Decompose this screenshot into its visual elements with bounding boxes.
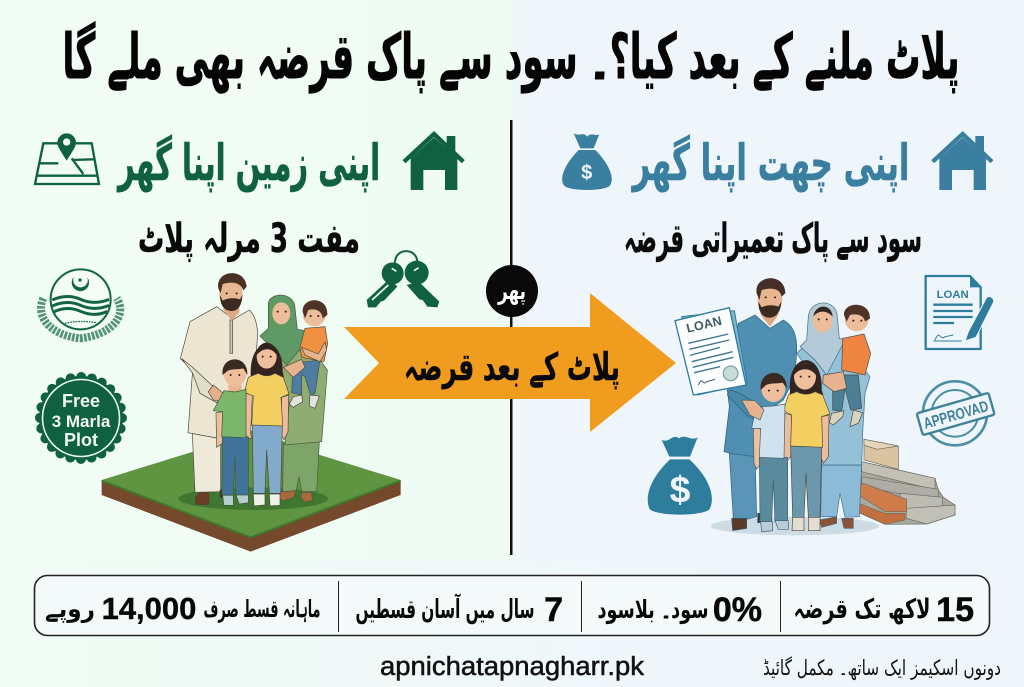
girl — [789, 360, 823, 395]
stat: zero percent interest: 0% — [713, 591, 762, 629]
stat: 15 lakh loan: لاکھ تک قرضہ — [794, 594, 930, 625]
left heading: اپنی زمین اپنا گھر — [116, 134, 380, 193]
grass plot — [102, 430, 401, 537]
father — [724, 315, 797, 531]
icon: approved stamp — [917, 381, 995, 445]
toddler — [283, 327, 328, 408]
website: apnichatapnagharr.pk — [380, 653, 644, 681]
black circle: then — [486, 265, 538, 317]
icon: loan paper and pen — [926, 276, 994, 349]
badge: Free 3 Marla Plot: 3 Marla — [52, 412, 111, 431]
illustration: family on a grass plot — [102, 273, 401, 552]
icon: money bag small — [562, 133, 612, 190]
loan document — [675, 308, 747, 395]
icon: loan paper and pen: LOAN — [937, 289, 969, 301]
panel: right loan scheme — [562, 133, 995, 535]
stat: monthly installment: ماہانہ قسط صرف — [204, 595, 320, 623]
icon: money bag large — [648, 437, 712, 515]
stat: monthly installment: روپے — [45, 595, 95, 623]
stat: seven years — [356, 591, 563, 629]
icon: money bag large: $ — [670, 468, 691, 510]
stat: 15 lakh loan: 15 — [936, 591, 974, 629]
icon: keys — [367, 251, 439, 307]
panel: left plot scheme — [35, 133, 463, 552]
icon: approved stamp: APPROVAD — [922, 398, 990, 433]
icon: blue house — [933, 134, 992, 190]
stat: seven years: سال میں آسان قسطیں — [356, 593, 534, 625]
left subheading: مفت 3 مرلہ پلاٹ — [138, 216, 360, 262]
soil block — [102, 480, 401, 552]
mother — [260, 295, 327, 502]
stat: seven years: 7 — [544, 591, 563, 629]
boy — [761, 375, 785, 402]
arrow: loan after plot: پلاٹ کے بعد قرضہ — [404, 345, 620, 389]
arrow: loan after plot — [344, 293, 676, 432]
black circle: then: پھر — [497, 277, 526, 305]
stat: monthly installment — [45, 591, 320, 626]
mother — [797, 303, 870, 528]
loan document: LOAN — [685, 314, 723, 336]
icon: map pin — [35, 133, 99, 184]
building materials — [857, 439, 955, 524]
icon: green house — [404, 134, 463, 190]
icon: Punjab emblem — [41, 269, 120, 338]
icon: money bag small: $ — [581, 162, 592, 184]
badge: Free 3 Marla Plot: Free — [62, 391, 100, 411]
girl — [251, 344, 284, 377]
boy — [228, 385, 242, 393]
toddler — [823, 334, 871, 427]
stat: zero percent interest: سود۔ بلاسود — [598, 595, 708, 625]
ground shadow — [711, 517, 879, 535]
stat: monthly installment: 14,000 — [102, 591, 196, 626]
father — [180, 307, 258, 505]
badge: Free 3 Marla Plot — [39, 376, 123, 460]
stats bar — [34, 576, 990, 636]
illustration: family with loan document and materials — [648, 276, 995, 535]
badge: Free 3 Marla Plot: Plot — [64, 430, 98, 450]
